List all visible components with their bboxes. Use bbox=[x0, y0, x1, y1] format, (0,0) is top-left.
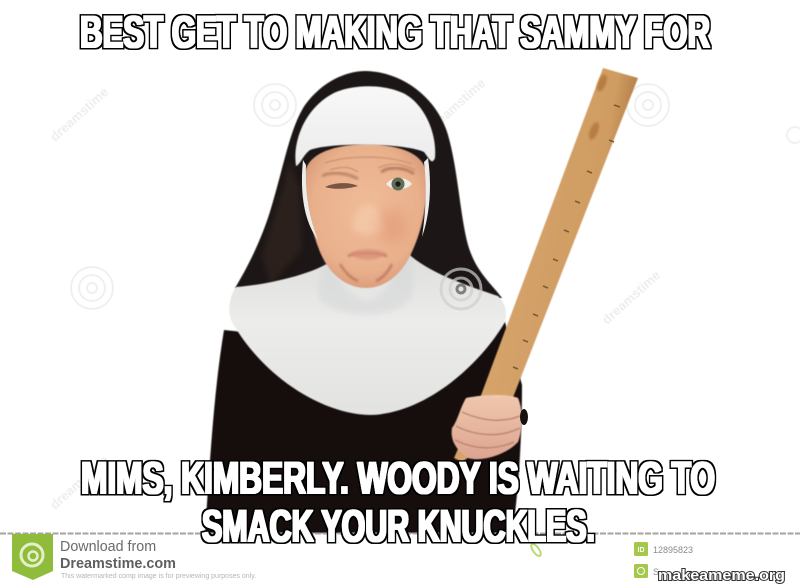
copyright badge bbox=[634, 564, 659, 578]
bottom caption line 2: SMACK YOUR KNUCKLES. bbox=[202, 500, 595, 552]
download text: Dreamstime.com bbox=[60, 556, 176, 572]
nun figure bbox=[205, 71, 522, 533]
collar shading bbox=[318, 247, 414, 314]
watermarks: dreamstime bbox=[424, 75, 488, 135]
ruler ticks bbox=[513, 105, 620, 369]
download text: Download from bbox=[60, 539, 156, 555]
finger creases bbox=[455, 412, 520, 448]
image id: ID bbox=[638, 547, 644, 554]
image id bbox=[634, 542, 693, 556]
site watermark: makeameme.org bbox=[658, 567, 785, 584]
download text bbox=[60, 539, 256, 580]
ruler bbox=[454, 68, 638, 462]
footer dashed line bbox=[0, 532, 800, 534]
black veil bbox=[235, 71, 502, 300]
sleeve button bbox=[520, 409, 528, 425]
watermarks: dreamstime bbox=[47, 452, 111, 512]
habit body bbox=[205, 322, 522, 533]
white collar cape bbox=[229, 247, 506, 415]
watermarks: dreamstime bbox=[47, 84, 111, 144]
forehead wrinkles bbox=[325, 157, 415, 172]
collar watermark spiral bbox=[441, 269, 481, 309]
nose bbox=[352, 205, 385, 234]
winking eye bbox=[322, 173, 358, 189]
face bbox=[305, 144, 427, 288]
copyright badge: S bbox=[653, 567, 659, 577]
white forehead band bbox=[295, 86, 435, 166]
open eye bbox=[381, 168, 414, 190]
download text: This watermarked comp image is for previewing purposes only. bbox=[61, 573, 256, 580]
watermarks bbox=[47, 75, 800, 512]
dreamstime badge bbox=[12, 534, 53, 580]
frowning mouth bbox=[340, 253, 392, 281]
ruler stains bbox=[595, 73, 609, 93]
image id: 12895823 bbox=[653, 545, 693, 555]
watermarks: dreamstime bbox=[599, 267, 663, 327]
green leaf mark bbox=[530, 543, 542, 557]
cheek blush bbox=[377, 209, 407, 243]
veil brown highlight bbox=[262, 160, 302, 285]
lips bbox=[350, 249, 386, 260]
white inner coif edges bbox=[302, 158, 430, 240]
hand bbox=[452, 395, 522, 459]
